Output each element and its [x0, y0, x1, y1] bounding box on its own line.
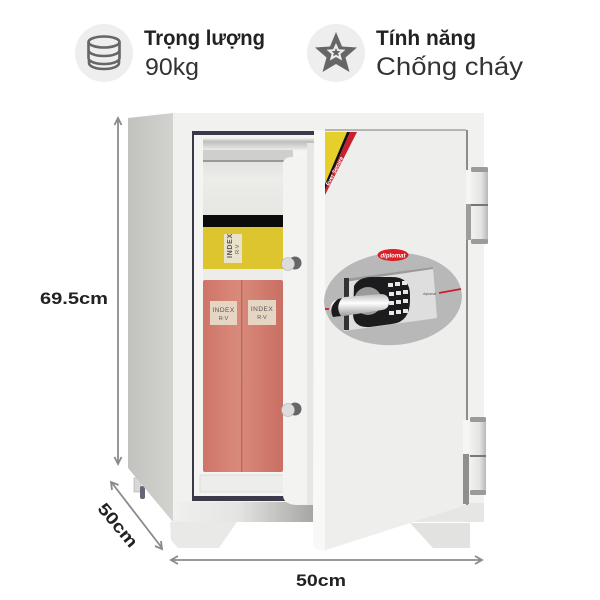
brand badge	[378, 249, 408, 261]
yellow binder	[203, 215, 283, 269]
front frame	[173, 113, 484, 522]
shelf	[203, 269, 283, 280]
icon: star	[307, 24, 365, 82]
handle	[330, 294, 389, 317]
opening	[192, 131, 316, 501]
heading: weight: Trọng lượng	[144, 27, 265, 50]
lock plate: diplomat	[423, 292, 436, 296]
side panel	[128, 113, 173, 522]
casters	[134, 478, 145, 499]
inner door	[283, 157, 307, 505]
red binders: R·V	[257, 315, 267, 321]
lower hinge	[463, 417, 486, 504]
label: width: 50cm	[296, 572, 346, 590]
label: height: 69.5cm	[40, 290, 108, 308]
red binders: INDEX	[251, 306, 273, 313]
red binders	[203, 280, 283, 472]
stat: weight	[75, 24, 265, 82]
arrow: depth	[111, 482, 162, 549]
red binders: INDEX	[212, 307, 235, 314]
heading: feature: Tính năng	[376, 27, 476, 50]
upper hinge	[466, 167, 488, 244]
safe	[128, 113, 488, 551]
door recess shadow	[466, 130, 468, 505]
arrow: height	[114, 118, 122, 464]
left foot	[170, 522, 237, 548]
interior wall	[203, 150, 293, 215]
stat: feature	[307, 24, 524, 82]
warranty sticker	[325, 132, 357, 195]
main door	[313, 130, 466, 551]
right foot	[410, 523, 470, 548]
upper knob	[282, 256, 302, 270]
brand badge: diplomat	[380, 254, 407, 260]
lock plate	[321, 248, 465, 350]
lower knob	[282, 402, 302, 416]
frame lower right	[400, 503, 484, 522]
red marks	[439, 289, 461, 293]
yellow binder: R·V	[235, 244, 241, 254]
frame bottom shade	[173, 502, 318, 522]
arrow: width	[171, 556, 482, 564]
value: feature: Chống cháy	[376, 53, 524, 81]
icon: coin stack	[75, 24, 133, 82]
keypad buttons	[388, 281, 408, 315]
red binders: R·V	[219, 316, 229, 322]
warranty sticker: Ever Secure	[325, 156, 345, 187]
yellow binder: INDEX	[227, 233, 234, 258]
label: depth: 50cm	[94, 499, 142, 551]
keypad housing	[353, 277, 410, 327]
value: weight: 90kg	[145, 54, 199, 81]
